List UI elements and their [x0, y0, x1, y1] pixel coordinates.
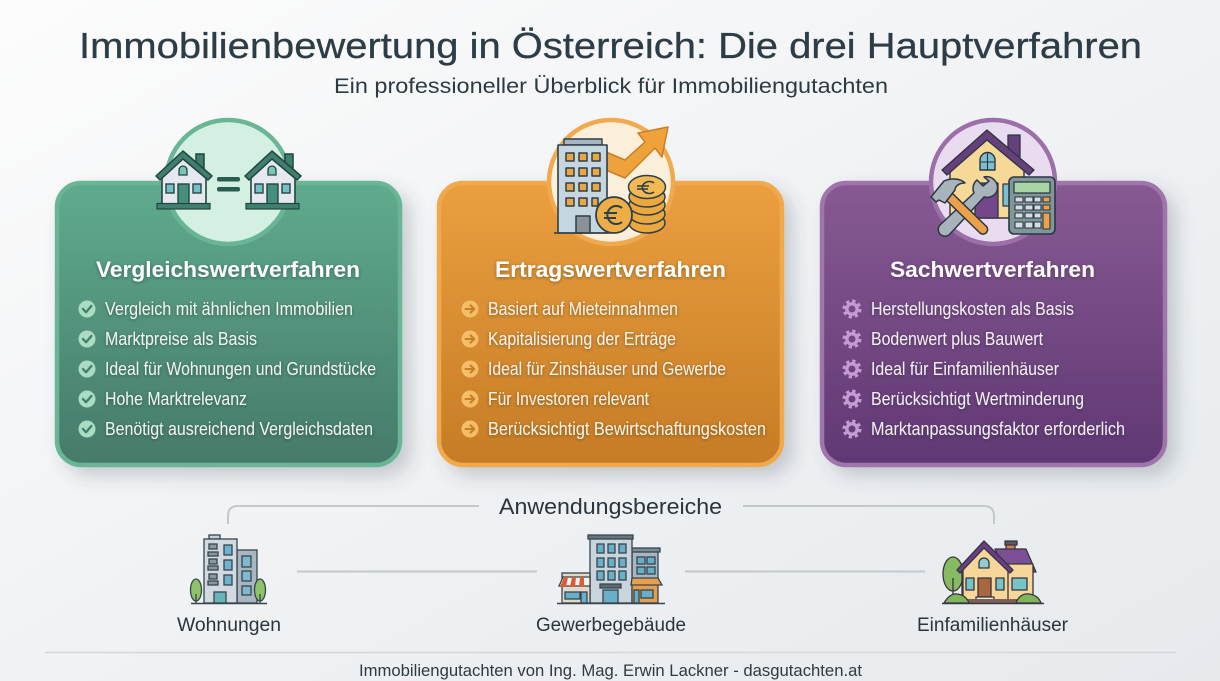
- bullet list: [844, 299, 1125, 439]
- panel: Ertragswertverfahren: [439, 120, 782, 465]
- bullet list: Vergleich mit ähnlichen Immobilien: [105, 299, 353, 319]
- bullet list: Berücksichtigt Wertminderung: [871, 389, 1084, 409]
- bullet list: Ideal für Wohnungen und Grundstücke: [105, 359, 376, 379]
- icon circle green: [166, 120, 290, 244]
- card background orange: [439, 183, 782, 465]
- bullet list: Bodenwert plus Bauwert: [871, 329, 1043, 349]
- bullet list: Hohe Marktrelevanz: [105, 389, 247, 409]
- icon: house, tools and calculator: [931, 130, 1055, 236]
- heading: Ertragswertverfahren: [495, 257, 726, 282]
- icon: family house: [942, 541, 1044, 604]
- bullet list: Berücksichtigt Bewirtschaftungskosten: [488, 419, 766, 439]
- label: Wohnungen: [177, 615, 281, 636]
- icon circle orange: [549, 120, 673, 244]
- bullet list: Kapitalisierung der Erträge: [488, 329, 676, 349]
- bullet list: Für Investoren relevant: [488, 389, 649, 409]
- bullet list: Ideal für Zinshäuser und Gewerbe: [488, 359, 726, 379]
- application: Wohnungen: [177, 535, 281, 636]
- icon circle purple: [931, 120, 1055, 244]
- bullet list: Benötigt ausreichend Vergleichsdaten: [105, 419, 373, 439]
- application: Einfamilienhäuser: [917, 541, 1069, 636]
- label: Gewerbegebäude: [536, 615, 686, 636]
- bullet list: Marktpreise als Basis: [105, 329, 257, 349]
- bullet list: [78, 299, 376, 439]
- bullet list: Ideal für Einfamilienhäuser: [871, 359, 1059, 379]
- bullet list: Basiert auf Mieteinnahmen: [488, 299, 678, 319]
- title: Immobilienbewertung in Österreich: Die drei Hauptverfahren: [79, 25, 1142, 66]
- footer: Immobiliengutachten von Ing. Mag. Erwin Lackner - dasgutachten.at: [359, 661, 862, 680]
- bullet list: Herstellungskosten als Basis: [871, 299, 1074, 319]
- bullet list: [462, 299, 766, 439]
- panel: Sachwertverfahren: [822, 120, 1165, 465]
- icon: building, rising arrow and coins: [554, 127, 668, 233]
- card background green: [57, 183, 400, 465]
- section heading: Anwendungsbereiche: Anwendungsbereiche: [499, 494, 722, 519]
- icon: apartment building: [190, 535, 267, 604]
- bullet list: Marktanpassungsfaktor erforderlich: [871, 419, 1125, 439]
- label: Einfamilienhäuser: [917, 615, 1069, 636]
- subtitle: Ein professioneller Überblick für Immobiliengutachten: [334, 75, 888, 98]
- connector lines: [228, 506, 994, 572]
- icon: two equal houses: [156, 151, 301, 209]
- card background purple: [822, 183, 1165, 465]
- heading: Vergleichswertverfahren: [96, 257, 360, 282]
- icon: commercial buildings: [557, 535, 665, 604]
- panel: Vergleichswertverfahren: [57, 120, 400, 465]
- application: Gewerbegebäude: [536, 535, 686, 636]
- heading: Sachwertverfahren: [890, 257, 1095, 282]
